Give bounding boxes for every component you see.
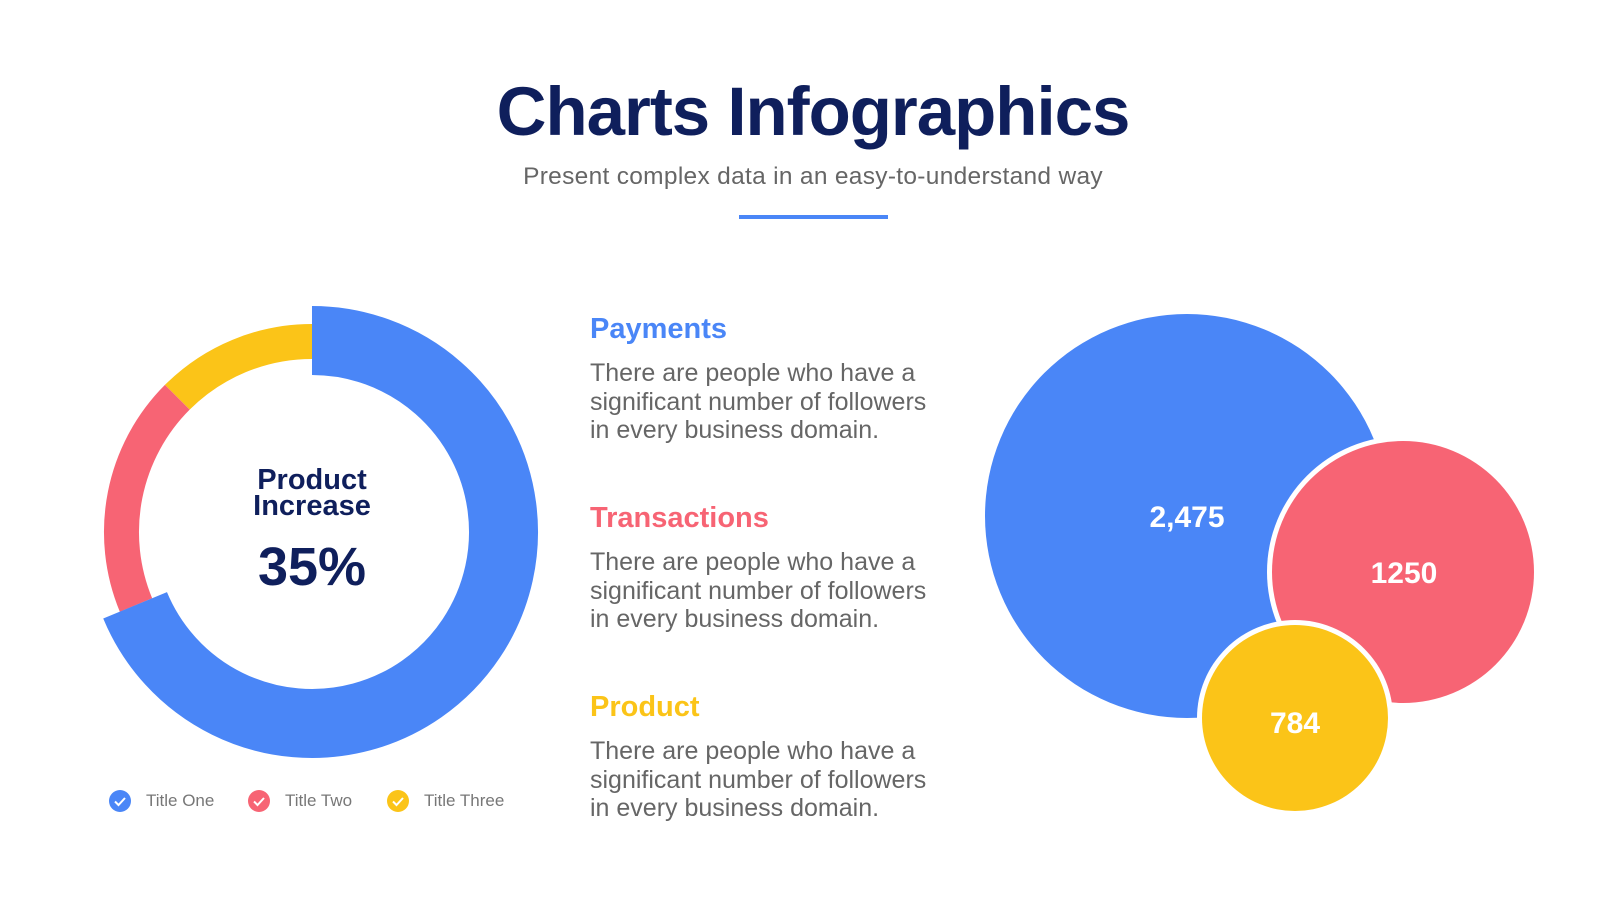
legend item: Title Two: Title Two <box>285 791 352 810</box>
bubble: red 1250: 1250 <box>1371 557 1437 590</box>
legend item: Title Three <box>387 790 504 812</box>
bubble chart <box>985 314 1534 811</box>
body: Product: significant number of followers <box>590 766 926 794</box>
body: Product: in every business domain. <box>590 794 879 822</box>
legend item: Title Three: Title Three <box>424 791 504 810</box>
body: Transactions: significant number of followers <box>590 576 926 604</box>
legend <box>109 790 504 812</box>
body: Payments <box>590 359 926 444</box>
donut chart <box>103 306 538 758</box>
bubble: blue 2,475: 2,475 <box>1149 501 1225 534</box>
segment: red <box>121 397 177 605</box>
legend item: Title Two <box>248 790 352 812</box>
bubble: yellow 784: 784 <box>1270 707 1320 740</box>
body: Transactions <box>590 548 926 633</box>
segment: blue <box>135 340 504 724</box>
heading: Payments: Payments <box>590 313 727 345</box>
title: Charts Infographics <box>497 73 1129 150</box>
body: Payments: in every business domain. <box>590 416 879 444</box>
title underline <box>739 215 888 219</box>
text block: Transactions <box>590 502 926 633</box>
body: Product: There are people who have a <box>590 737 915 765</box>
heading: Product: Product <box>590 691 700 723</box>
body: Transactions: There are people who have a <box>590 548 915 576</box>
body: Transactions: in every business domain. <box>590 605 879 633</box>
body: Payments: significant number of followers <box>590 388 926 416</box>
body: Payments: There are people who have a <box>590 359 915 387</box>
legend item: Title One <box>109 790 214 812</box>
text block: Product <box>590 691 926 822</box>
text block: Payments <box>590 313 926 444</box>
segment: yellow <box>177 342 312 397</box>
bubble: red 1250 <box>1267 436 1539 708</box>
subtitle: Present complex data in an easy-to-understand way <box>523 163 1103 190</box>
center label <box>253 464 371 597</box>
center label: Increase <box>253 490 371 522</box>
bubble: yellow 784 <box>1197 620 1393 816</box>
center label: 35% <box>258 537 366 597</box>
heading: Transactions: Transactions <box>590 502 769 534</box>
body: Product <box>590 737 926 822</box>
legend item: Title One: Title One <box>146 791 214 810</box>
center label: Product <box>257 464 367 496</box>
bubble: blue 2,475 <box>985 314 1389 718</box>
